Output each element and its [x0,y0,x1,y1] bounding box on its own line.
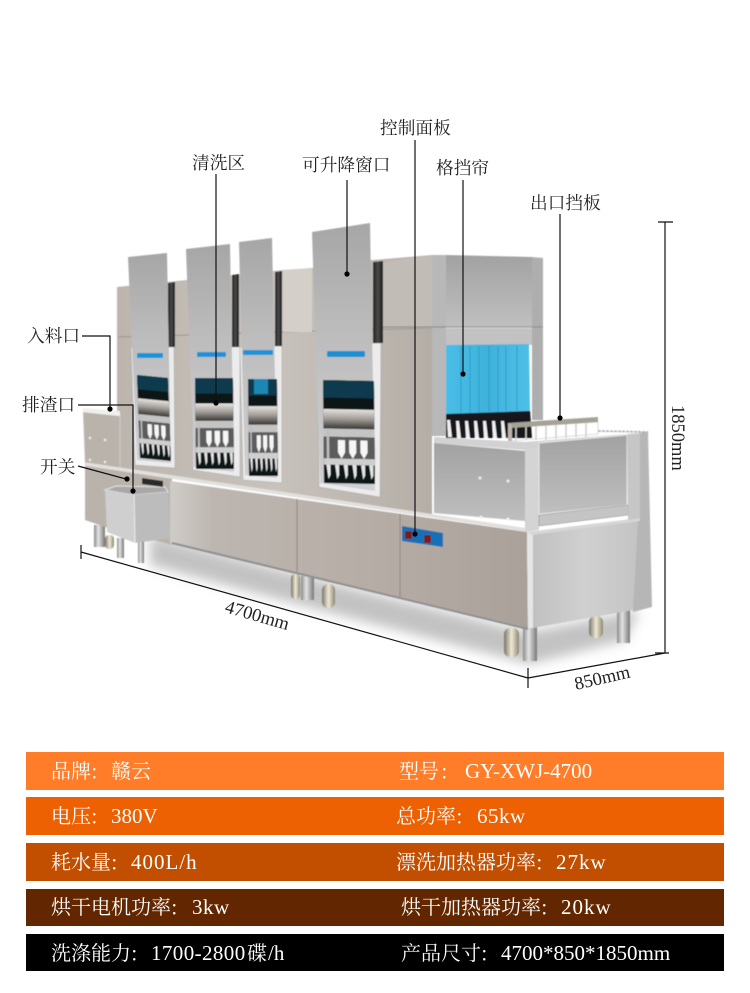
exit baffle and rack [508,417,648,441]
row 2: voltage and total power: 电压 [51,800,91,829]
dimension lines [81,222,687,695]
left door [128,253,175,468]
row 1: brand and model: : [441,755,448,784]
row 4: dry motor and dry heater: : [171,891,178,920]
row 2: voltage and total power [26,797,724,835]
row 3: water use and rinse heater: 漂洗加热器功率 [396,846,536,875]
ledge [85,464,527,530]
waste bin [105,486,170,543]
height dimension [655,222,687,653]
machine labels [22,115,601,479]
label: wash zone: 清洗区 [192,150,245,175]
leader: switch [78,466,130,482]
lower base front [170,481,528,628]
leader: exit baffle [557,214,563,421]
leader: wash zone [213,174,219,406]
leader: lift window [344,180,350,277]
row 4: dry motor and dry heater: 烘干电机功率 [51,891,171,920]
hood exit column [380,255,543,438]
label: slag outlet: 排渣口 [22,392,75,417]
row 1: brand and model: : [91,755,98,784]
fourth door [312,223,383,497]
row 2: voltage and total power: : [456,800,463,829]
label: lift window: 可升降窗口 [302,152,390,177]
leader: slag outlet [78,405,136,494]
leader: curtain [460,180,466,377]
floor shadow [150,535,640,664]
left feed box [83,412,120,470]
discharge conveyor table [434,433,640,532]
dark conveyor opening [446,410,532,438]
row 4: dry motor and dry heater: 烘干加热器功率 [401,891,541,920]
spec table [26,752,724,971]
machine legs and casters [94,525,630,661]
length dimension: 4700mm [223,598,292,635]
control panel [402,526,443,547]
leader: control panel [412,140,418,537]
row 1: brand and model: GY-XWJ-4700 [465,759,592,783]
blue curtain [446,344,530,414]
label: curtain: 格挡帘 [436,155,489,180]
width dimension [528,653,665,695]
row 3: water use and rinse heater: : [111,846,118,875]
row 3: water use and rinse heater: 27kw [556,850,607,874]
row 4: dry motor and dry heater: 20kw [561,895,612,919]
row 5: capacity and size: 4700*850*1850mm [501,941,670,965]
row 5: capacity and size: : [481,937,488,966]
row 5: capacity and size: 碟 [247,937,267,966]
row 4: dry motor and dry heater: : [541,891,548,920]
row 1: brand and model: 品牌 [51,755,91,784]
leader: feed inlet [82,336,113,412]
row 1: brand and model [26,752,724,790]
right end panel [532,520,638,628]
right side column [627,432,652,612]
row 1: brand and model: 型号 [399,755,439,784]
row 2: voltage and total power: 380V [111,804,158,828]
upper body back [117,255,432,516]
row 5: capacity and size: 1700-2800 [151,941,246,965]
row 3: water use and rinse heater [26,843,724,881]
row 4: dry motor and dry heater [26,889,724,926]
row 2: voltage and total power: 总功率 [396,800,456,829]
row 5: capacity and size: : [131,937,138,966]
row 5: capacity and size: /h [268,941,285,965]
label: control panel: 控制面板 [380,115,451,140]
row 4: dry motor and dry heater: 3kw [192,895,230,919]
row 1: brand and model: 赣云 [111,755,151,784]
leader lines [78,140,563,537]
width dimension: 850mm [573,663,633,695]
label: feed inlet: 入料口 [27,323,80,348]
row 3: water use and rinse heater: 400L/h [131,850,198,874]
second door [186,244,240,477]
row 2: voltage and total power: 65kw [477,804,526,828]
row 5: capacity and size [26,934,724,971]
third door [239,238,282,483]
label: exit baffle: 出口挡板 [530,190,601,215]
row 5: capacity and size: 产品尺寸 [401,937,481,966]
dishwasher machine [83,223,652,664]
label: switch: 开关 [40,454,76,479]
row 3: water use and rinse heater: : [536,846,543,875]
length dimension [81,545,528,688]
row 3: water use and rinse heater: 耗水量 [51,846,111,875]
row 2: voltage and total power: : [91,800,98,829]
height dimension: 1850mm [667,405,687,471]
row 5: capacity and size: 洗涤能力 [51,937,131,966]
switch slot [142,478,163,487]
